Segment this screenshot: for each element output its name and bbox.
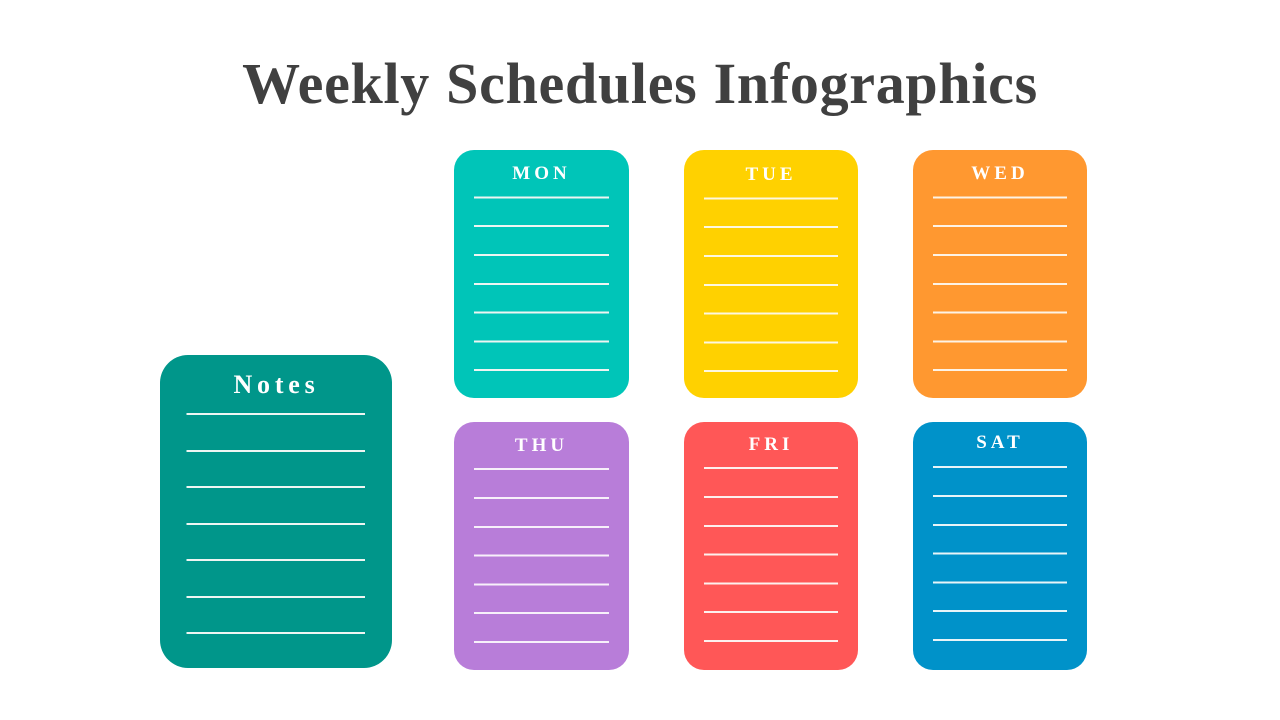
panel: thursday — [454, 422, 629, 670]
heading: monday: MON — [512, 163, 571, 184]
heading: friday: FRI — [749, 434, 793, 455]
heading: thursday: THU — [515, 435, 568, 456]
heading: tuesday: TUE — [745, 164, 797, 185]
writing lines: saturday — [933, 466, 1067, 641]
writing lines: monday — [474, 196, 609, 371]
panel: tuesday — [684, 150, 858, 398]
heading: notes: Notes — [233, 370, 320, 399]
panel: notes — [160, 355, 392, 668]
writing lines: tuesday — [704, 198, 838, 372]
title: Weekly Schedules Infographics — [242, 51, 1038, 116]
writing lines: wednesday — [933, 196, 1067, 371]
heading: wednesday: WED — [971, 163, 1029, 184]
panel: friday — [684, 422, 858, 670]
panel: monday — [454, 150, 629, 398]
panel: wednesday — [913, 150, 1087, 398]
writing lines: thursday — [474, 468, 609, 643]
writing lines: friday — [704, 467, 838, 642]
writing lines: notes — [186, 413, 365, 634]
heading: saturday: SAT — [976, 432, 1024, 453]
panel: saturday — [913, 422, 1087, 670]
